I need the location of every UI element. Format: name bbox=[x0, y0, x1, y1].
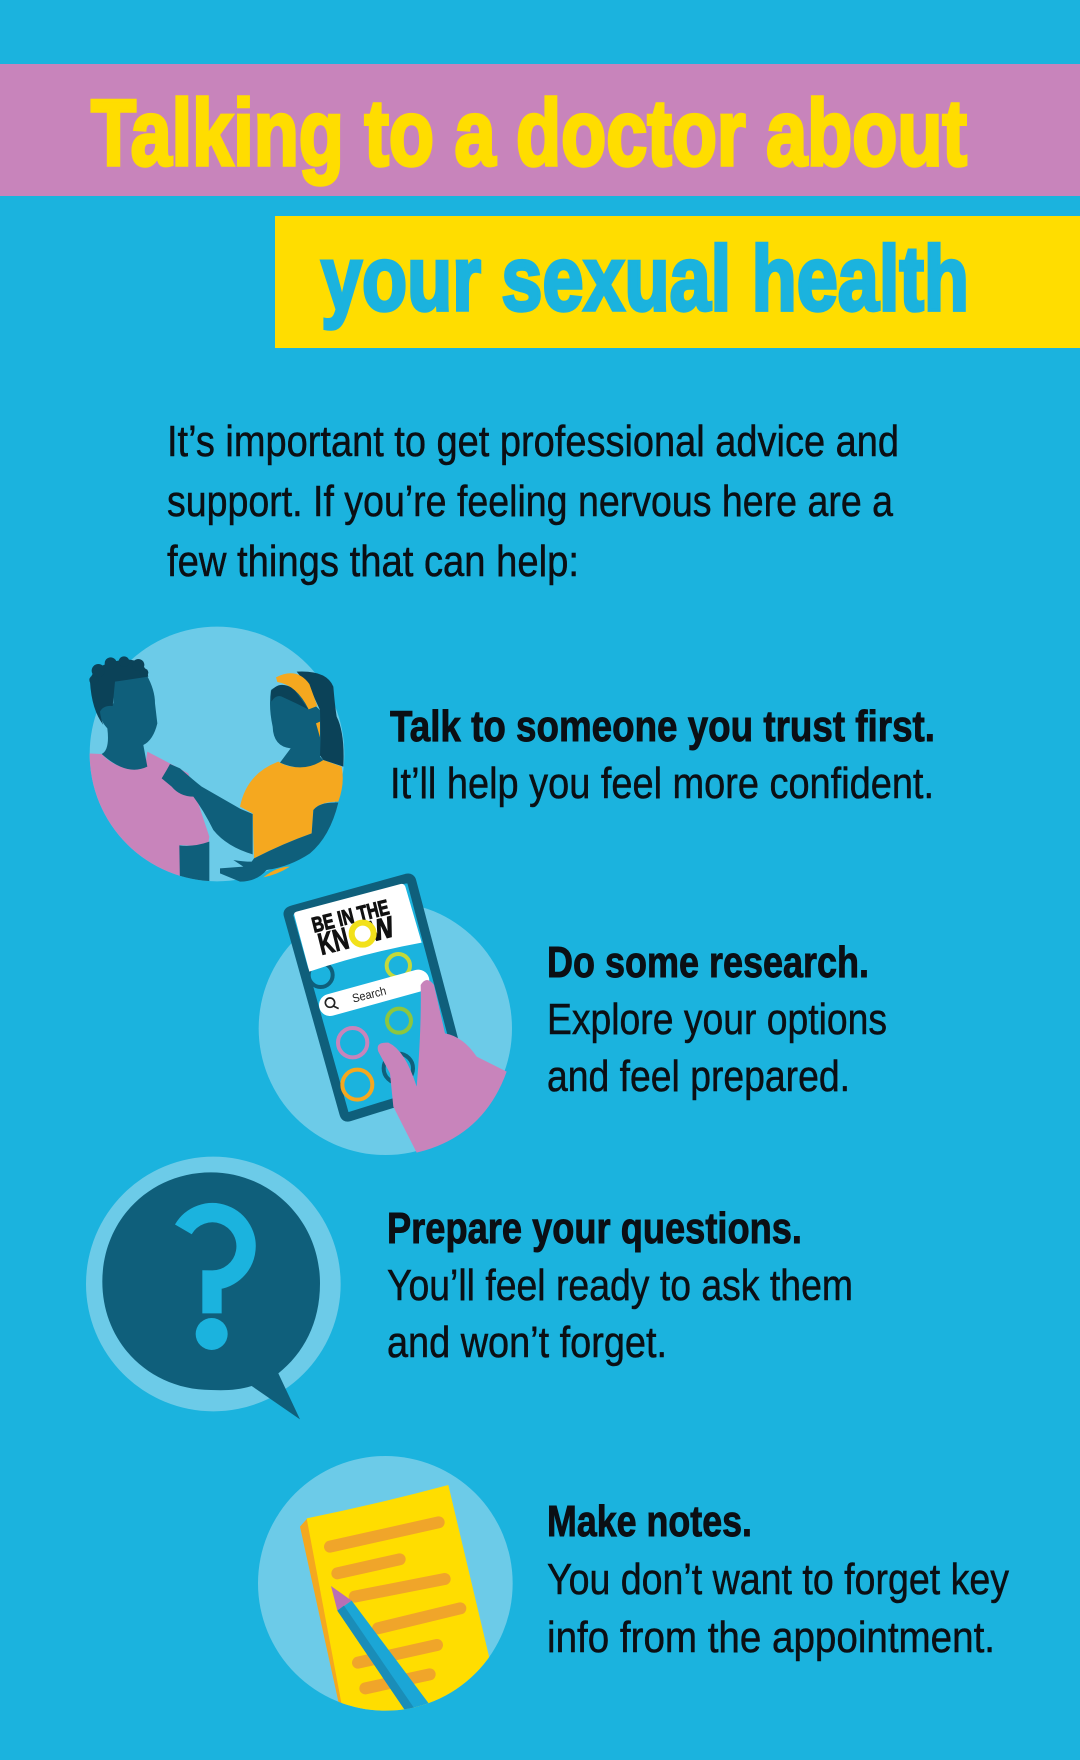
icon: phone with search: KN bbox=[315, 922, 352, 962]
text: make notes: Make notes. bbox=[547, 1497, 752, 1546]
icon: phone with search: W bbox=[366, 910, 398, 948]
text: prepare your questions: Prepare your questions. bbox=[387, 1204, 802, 1253]
text: make notes: You don’t want to forget key bbox=[547, 1555, 1009, 1604]
intro text bbox=[167, 417, 899, 586]
text: do some research: Explore your options bbox=[547, 995, 887, 1044]
icon: phone with search: BE IN THE bbox=[309, 895, 392, 938]
text: talk to someone: It’ll help you feel more confident. bbox=[390, 759, 934, 808]
icon: phone with search bbox=[259, 878, 512, 1155]
icon: two people talking bbox=[83, 627, 344, 887]
text: make notes: info from the appointment. bbox=[547, 1613, 995, 1662]
text: prepare your questions: and won’t forget. bbox=[387, 1318, 667, 1367]
intro text: It’s important to get professional advice and bbox=[167, 417, 899, 466]
text: make notes bbox=[547, 1497, 1009, 1662]
text: do some research bbox=[547, 938, 887, 1101]
text: talk to someone: Talk to someone you trust first. bbox=[390, 702, 935, 751]
text: prepare your questions bbox=[387, 1204, 853, 1367]
icon: phone with search: Search bbox=[351, 984, 388, 1006]
icon: notepad and pencil bbox=[258, 1456, 513, 1711]
text: do some research: Do some research. bbox=[547, 938, 869, 987]
intro text: few things that can help: bbox=[167, 537, 579, 586]
text: talk to someone bbox=[390, 702, 935, 808]
intro text: support. If you’re feeling nervous here are a bbox=[167, 477, 893, 526]
text: do some research: and feel prepared. bbox=[547, 1052, 850, 1101]
text: prepare your questions: You’ll feel ready to ask them bbox=[387, 1261, 853, 1310]
icon: question speech bubble bbox=[86, 1157, 341, 1419]
